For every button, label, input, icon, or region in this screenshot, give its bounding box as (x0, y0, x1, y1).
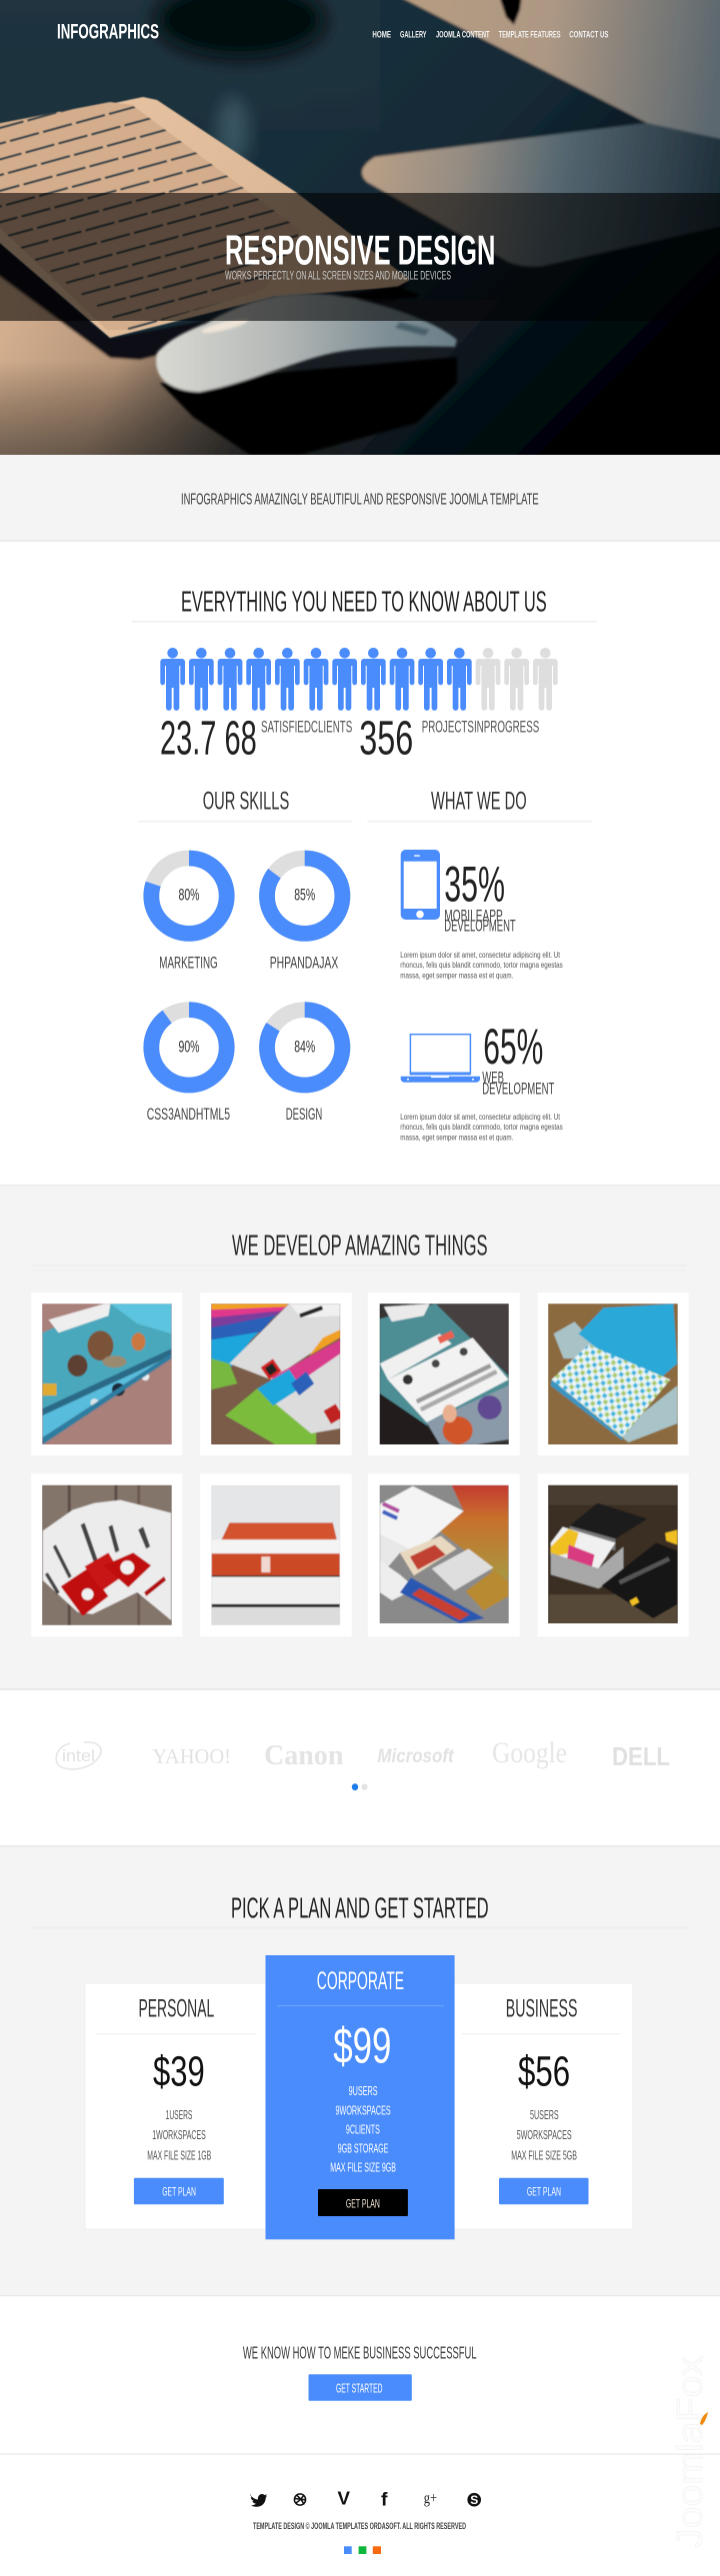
stat: mobile app development: MOBILEAPP (444, 907, 503, 926)
pricing card: corporate (highlighted) (266, 1955, 455, 2239)
button: get plan: GET PLAN (162, 2185, 196, 2199)
button: get started: GET STARTED (336, 2381, 382, 2395)
tagline band (0, 455, 720, 542)
web description text (400, 1113, 563, 1142)
call to action text: WE KNOW HOW TO MEKE BUSINESS SUCCESSFUL (243, 2342, 477, 2362)
button: get plan: GET PLAN (527, 2185, 561, 2199)
stat: web development (482, 1019, 554, 1098)
stat: projects in progress: PROJECTSINPROGRESS (422, 718, 539, 736)
pricing card: personal (85, 1983, 275, 2229)
hero headline: RESPONSIVE DESIGN (225, 226, 495, 273)
icon: facebook: f (381, 2489, 389, 2509)
portfolio card 3: responsive website mockup (368, 1292, 520, 1455)
navigation menu: TEMPLATE FEATURES (499, 30, 561, 40)
pricing card: personal: MAX FILE SIZE 1GB (147, 2147, 211, 2162)
section: client logos (0, 1688, 720, 1847)
icon: laptop (401, 1035, 480, 1083)
donut: css3 and html5 90%: CSS3ANDHTML5 (147, 1105, 230, 1124)
donut: marketing 80%: 80% (178, 886, 200, 904)
donut: php and ajax 85%: 85% (294, 886, 315, 904)
pricing card: personal: 1USERS (166, 2107, 193, 2122)
stat: mobile app development: DEVELOPMENT (444, 917, 516, 936)
portfolio card 1: tablet mockup (31, 1292, 182, 1455)
mobile description text: massa, eget semper massa est et quam. (400, 971, 513, 980)
what we do heading: WHAT WE DO (431, 787, 527, 815)
section: call to action (0, 2295, 720, 2455)
stat: web development: WEB (482, 1068, 504, 1087)
navigation menu: HOME (372, 30, 391, 40)
hero photo: keyboard, mouse and monitor (0, 0, 720, 475)
navigation menu: JOOMLA CONTENT (436, 30, 490, 40)
navigation menu: CONTACT US (569, 30, 608, 40)
stat: mobile app development: 35% (444, 857, 505, 913)
icon: skype (467, 2493, 481, 2507)
portfolio card 7: audiovisual branding set (368, 1473, 520, 1636)
mobile description text: rhoncus, felis quis blandit commodo, tortor magna egestas (400, 961, 563, 970)
portfolio card 5: red and white business cards on wood (31, 1473, 182, 1636)
pricing card: corporate (highlighted): 9CLIENTS (346, 2123, 380, 2137)
section: about us (0, 542, 720, 1185)
hero subtitle: WORKS PERFECTLY ON ALL SCREEN SIZES AND MOBILE DEVICES (225, 269, 451, 283)
logo: intel: intel (62, 1746, 95, 1765)
carousel dots (352, 1783, 368, 1790)
navigation menu (372, 30, 608, 40)
icon: smartphone (401, 850, 440, 920)
web description text: rhoncus, felis quis blandit commodo, tortor magna egestas (400, 1123, 563, 1132)
stat: mobile app development (444, 857, 516, 936)
copyright text: TEMPLATE DESIGN © JOOMLA TEMPLATES ORDASOFT. ALL RIGHTS RESERVED (253, 2521, 466, 2532)
stat: web development: 65% (483, 1019, 543, 1075)
donut: php and ajax 85%: PHPANDAJAX (270, 953, 338, 972)
our skills heading: OUR SKILLS (203, 787, 289, 815)
pricing card: corporate (highlighted): $99 (333, 2017, 391, 2073)
pricing card: corporate (highlighted): CORPORATE (317, 1967, 404, 1995)
stat: satisfied clients: 23.7 68 (160, 712, 257, 765)
portfolio card 2: rainbow business cards (200, 1292, 352, 1455)
logo: google: Google (492, 1736, 567, 1769)
web description text: Lorem ipsum dolor sit amet, consectetur adipiscing elit. Ut (400, 1113, 561, 1122)
logo: dell: DELL (612, 1741, 670, 1771)
pricing card: corporate (highlighted): 9GB STORAGE (338, 2142, 388, 2156)
pricing card: corporate (highlighted): 9WORKSPACES (336, 2103, 391, 2117)
section: pricing (0, 1847, 720, 2295)
portfolio card 8: black and white card stacks (538, 1473, 689, 1636)
pricing card: personal: $39 (153, 2048, 205, 2096)
logo: INFOGRAPHICS (57, 21, 159, 44)
pricing card: corporate (highlighted): 9USERS (349, 2084, 378, 2098)
mobile description text (400, 951, 563, 980)
hero section (0, 0, 720, 475)
donut: design 84%: 84% (294, 1037, 315, 1056)
donut: marketing 80%: MARKETING (159, 953, 218, 972)
pricing card: personal: PERSONAL (138, 1995, 214, 2023)
colour theme swatches (344, 2546, 381, 2554)
icon: dribbble (294, 2494, 306, 2505)
pricing card: business: $56 (518, 2048, 570, 2096)
dark caption band (0, 193, 720, 321)
pricing card: corporate (highlighted): MAX FILE SIZE 9GB (330, 2161, 396, 2175)
logo: canon: Canon (264, 1740, 344, 1771)
stat: projects in progress: 356 (359, 712, 413, 765)
logo: intel (56, 1742, 101, 1769)
navigation menu: GALLERY (400, 30, 426, 40)
pricing card: personal: 1WORKSPACES (152, 2127, 206, 2142)
stat: web development: DEVELOPMENT (482, 1079, 554, 1098)
pricing card: business: MAX FILE SIZE 5GB (511, 2147, 577, 2162)
people pictogram: 11 of 14 highlighted (160, 648, 558, 711)
button: get plan (black) (318, 2189, 408, 2216)
gallery heading: WE DEVELOP AMAZING THINGS (232, 1231, 488, 1263)
icon: vimeo: V (338, 2489, 350, 2509)
web description text: massa, eget semper massa est et quam. (400, 1133, 513, 1142)
pricing card: business: BUSINESS (506, 1995, 577, 2023)
button: get plan (black): GET PLAN (346, 2196, 380, 2210)
portfolio card 6: orange notebooks (200, 1473, 352, 1636)
footer (0, 2356, 720, 2576)
portfolio card 4: patterned cards on burlap (538, 1292, 689, 1455)
logo: microsoft: Microsoft (377, 1746, 454, 1767)
button: get plan (134, 2178, 224, 2204)
donut: design 84%: DESIGN (286, 1105, 322, 1124)
icon: google plus: g+ (424, 2490, 437, 2507)
icon: skype: S (470, 2493, 478, 2507)
section: portfolio gallery (0, 1185, 720, 1689)
logo: yahoo: YAHOO! (152, 1744, 231, 1768)
stat: projects in progress (359, 712, 539, 765)
donut: design 84% (267, 1010, 342, 1124)
button: get started (308, 2374, 412, 2401)
donut: php and ajax 85% (267, 858, 342, 972)
watermark: JoomlaFox: JoomlaFox (669, 2356, 710, 2548)
donut: css3 and html5 90%: 90% (178, 1037, 200, 1056)
mobile description text: Lorem ipsum dolor sit amet, consectetur adipiscing elit. Ut (400, 951, 561, 960)
button: get plan (499, 2178, 588, 2204)
pricing heading: PICK A PLAN AND GET STARTED (231, 1892, 489, 1924)
pricing card: business (445, 1983, 633, 2229)
icon: twitter (251, 2493, 267, 2507)
donut: css3 and html5 90% (147, 1010, 230, 1124)
pricing card: business: 5USERS (530, 2107, 559, 2122)
pricing card: business: 5WORKSPACES (517, 2127, 572, 2142)
donut: marketing 80% (151, 858, 227, 972)
stat: satisfied clients: SATISFIEDCLIENTS (261, 718, 352, 736)
